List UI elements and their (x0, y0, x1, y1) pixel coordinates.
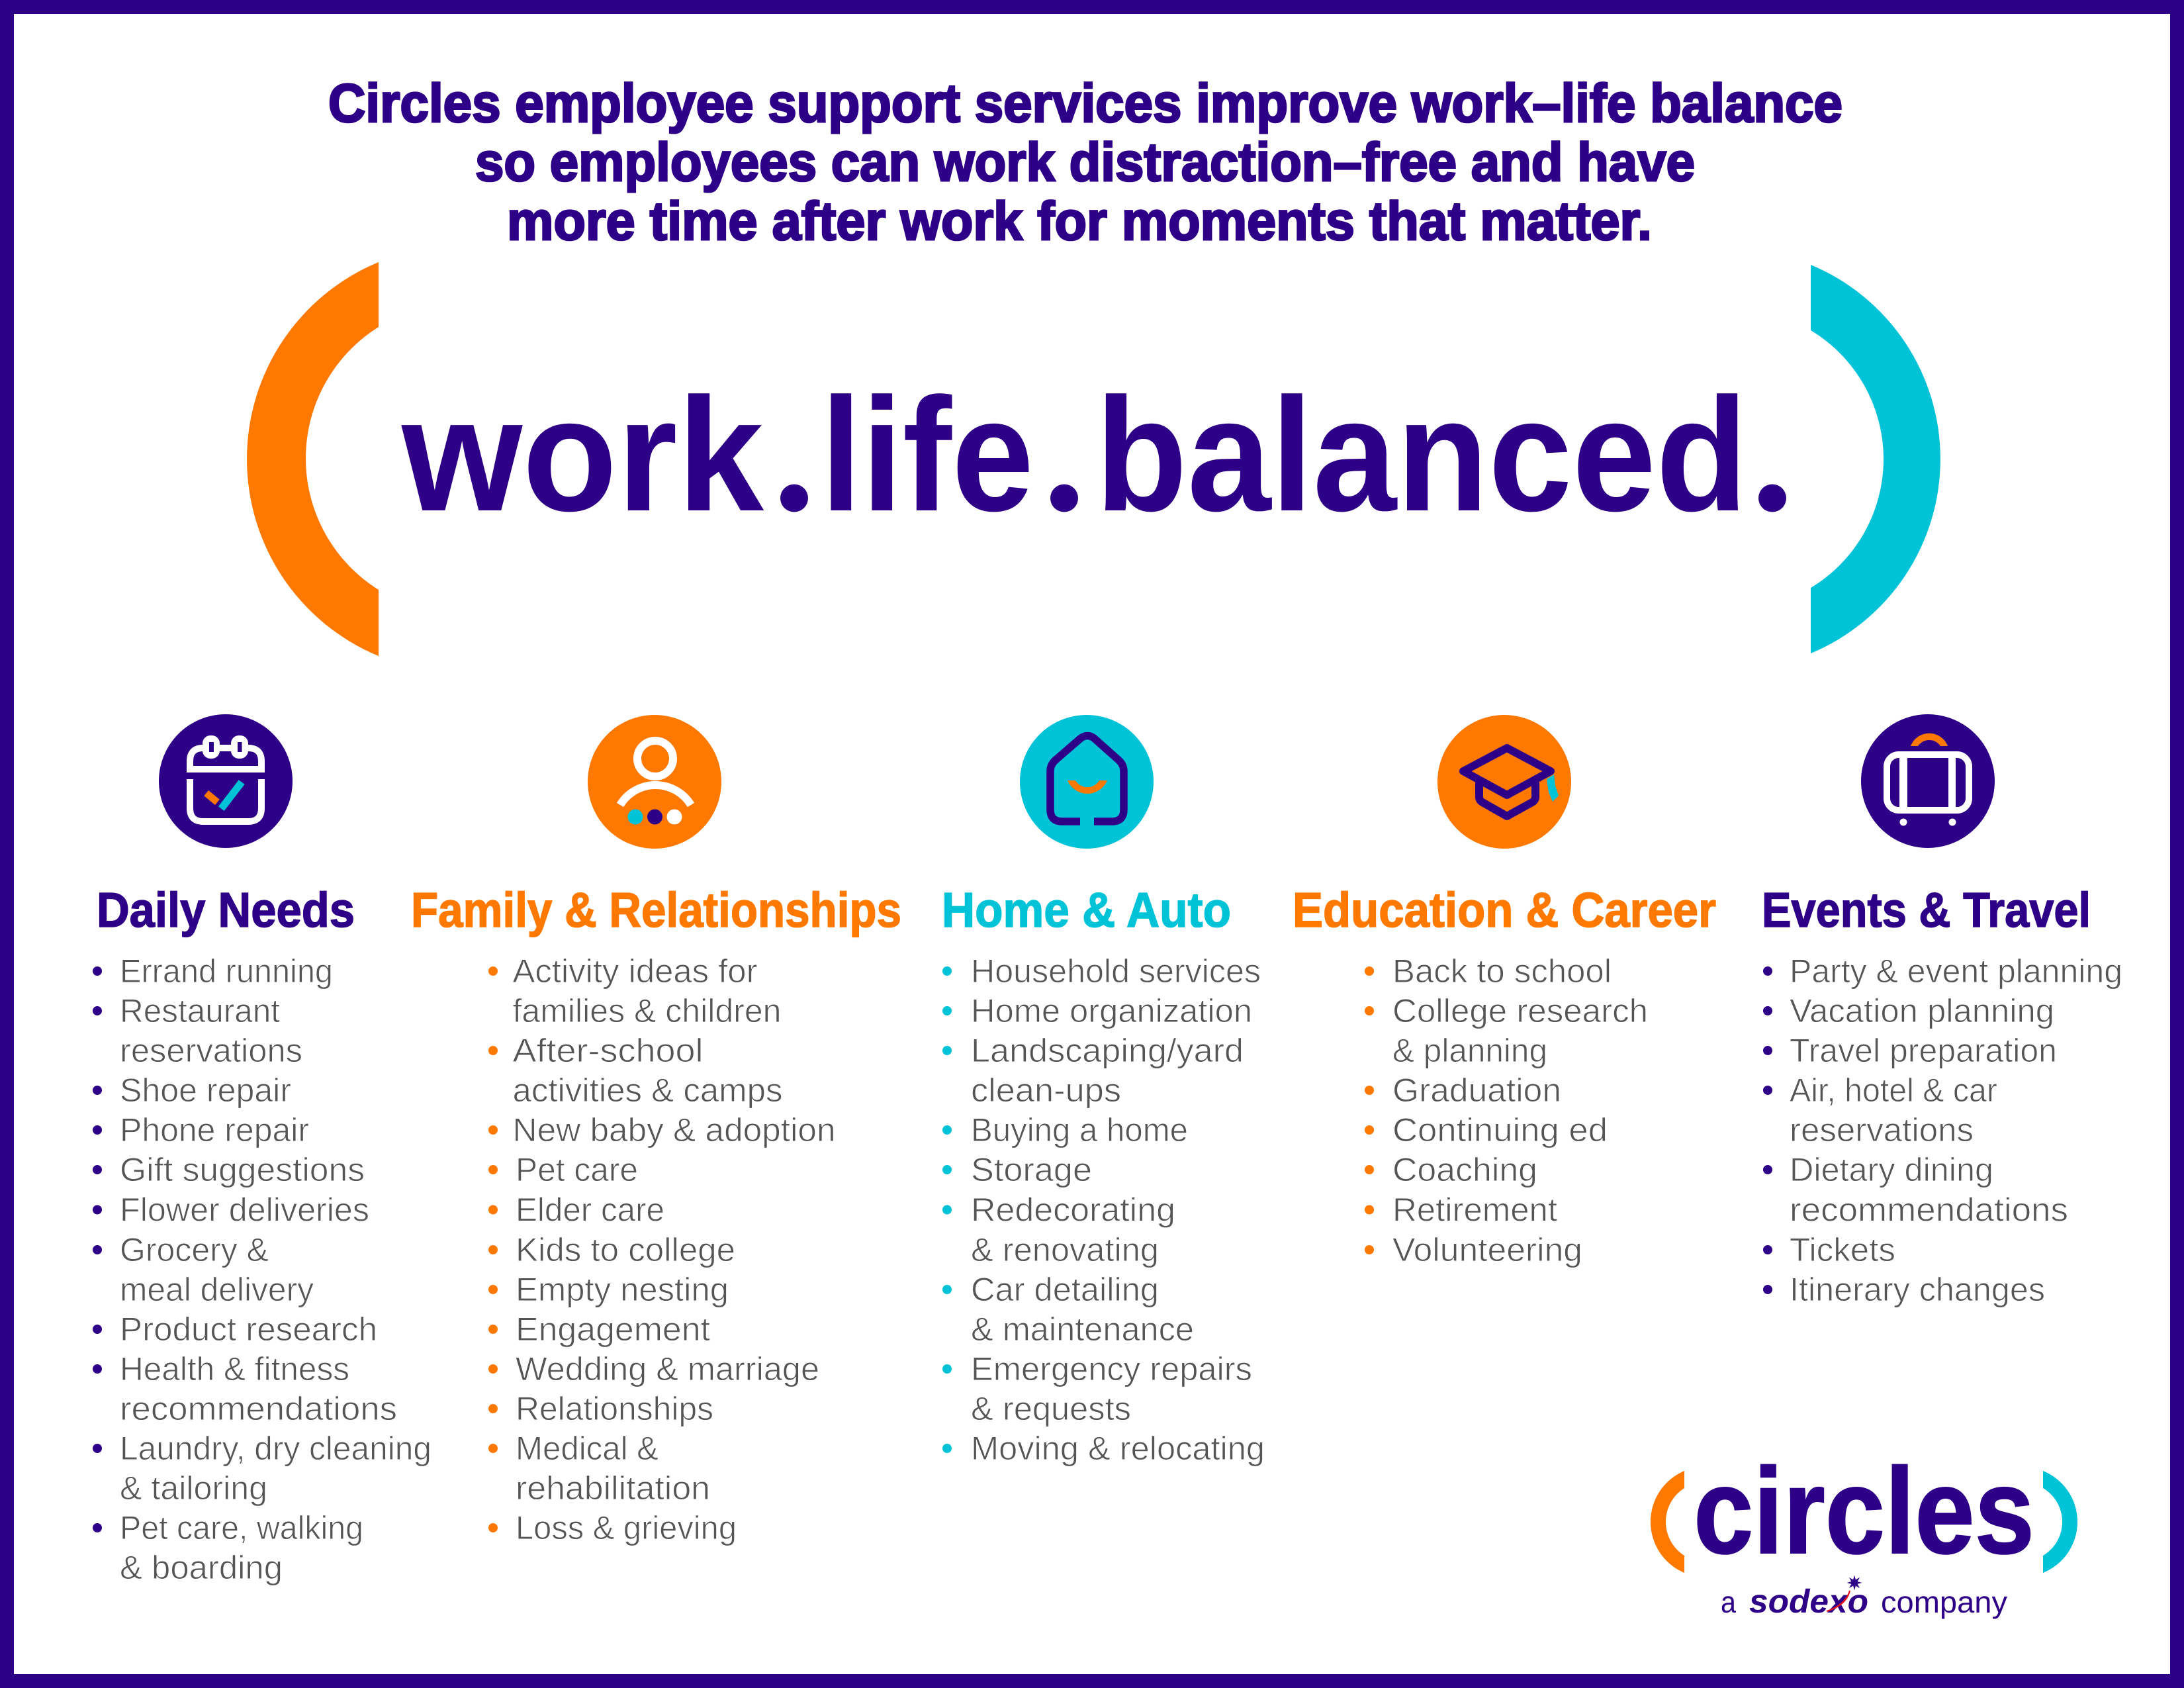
list: Events & Travel items (1763, 953, 2122, 1308)
list: Education & Career items: Back to school (1392, 953, 1612, 990)
list: Home & Auto items: Moving & relocating (971, 1430, 1265, 1467)
tagline: a sodexo company: a (1721, 1585, 1736, 1619)
list: Family & Relationships items: rehabilitation (516, 1470, 710, 1507)
title: so employees can work distraction–free and have (475, 132, 1695, 193)
list: Education & Career items (1365, 953, 1648, 1268)
list: Family & Relationships items: Relationships (516, 1390, 713, 1427)
list: Events & Travel items: Tickets (1790, 1231, 1895, 1268)
list: Family & Relationships items: Loss & grieving (516, 1509, 737, 1546)
list: Education & Career items: Volunteering (1392, 1231, 1582, 1268)
list: Daily Needs items: Errand running (120, 953, 333, 990)
list: Home & Auto items: Landscaping/yard (971, 1032, 1244, 1069)
tagline: a sodexo company (1721, 1575, 2007, 1620)
list: Daily Needs items: Restaurant (120, 992, 280, 1029)
panel: Education & Career (1293, 715, 1716, 1268)
list: Education & Career items: & planning (1392, 1032, 1547, 1069)
list: Daily Needs items: Pet care, walking (120, 1509, 363, 1546)
list: Family & Relationships items: Kids to college (516, 1231, 735, 1268)
list: Daily Needs items: Shoe repair (120, 1072, 291, 1109)
heading: Events & Travel: Events & Travel (1762, 882, 2091, 937)
list: Daily Needs items: & boarding (120, 1549, 283, 1586)
logo: circles, a sodexo company (1651, 1442, 2077, 1620)
list: Daily Needs items: Phone repair (120, 1111, 309, 1149)
heading: Daily Needs: Daily Needs (97, 882, 355, 937)
list: Family & Relationships items: Pet care (516, 1151, 638, 1188)
list: Home & Auto items: clean-ups (971, 1072, 1121, 1109)
list: Events & Travel items: Air, hotel & car (1790, 1072, 1997, 1109)
list: Daily Needs items: Grocery & (120, 1231, 269, 1268)
list: Home & Auto items: Buying a home (971, 1111, 1188, 1149)
list: Family & Relationships items: New baby & adoption (512, 1111, 835, 1149)
list: Daily Needs items: Gift suggestions (120, 1151, 365, 1188)
list: Family & Relationships items: Wedding & marriage (516, 1350, 819, 1387)
list: Home & Auto items: & maintenance (971, 1311, 1194, 1348)
title (328, 73, 1843, 252)
title: more time after work for moments that matter. (507, 191, 1652, 252)
list: Events & Travel items: Party & event planning (1790, 953, 2122, 990)
list: Family & Relationships items: families & children (512, 992, 781, 1029)
list: Home & Auto items: Redecorating (971, 1192, 1175, 1229)
headline: work.life.balanced.: . (777, 394, 811, 534)
list: Home & Auto items (942, 953, 1265, 1467)
list: Education & Career items: Graduation (1392, 1072, 1561, 1109)
headline: work.life.balanced.: balanced (1095, 364, 1748, 545)
list: Family & Relationships items: Elder care (516, 1192, 664, 1229)
list: Family & Relationships items: Activity ideas for (512, 953, 757, 990)
list: Education & Career items: Continuing ed (1392, 1111, 1608, 1149)
icon: graduation cap (1437, 715, 1571, 849)
list: Education & Career items: College research (1392, 992, 1648, 1029)
list: Daily Needs items: Product research (120, 1311, 377, 1348)
panel: Family & Relationships (411, 715, 901, 1546)
icon: person with three dots (588, 715, 721, 849)
list: Family & Relationships items: After-school (512, 1032, 703, 1069)
list: Home & Auto items: & requests (971, 1390, 1131, 1427)
list: Daily Needs items: Flower deliveries (120, 1192, 369, 1229)
icon: house with smile (1020, 715, 1154, 849)
heading: Home & Auto: Home & Auto (942, 882, 1231, 937)
list: Home & Auto items: Storage (971, 1151, 1092, 1188)
list: Daily Needs items: & tailoring (120, 1470, 267, 1507)
headline: work.life.balanced.: life (821, 364, 1034, 545)
list: Family & Relationships items: activities & camps (512, 1072, 782, 1109)
list: Home & Auto items: Household services (971, 953, 1261, 990)
panel: Daily Needs (93, 714, 432, 1586)
list: Events & Travel items: recommendations (1790, 1192, 2068, 1229)
list: Education & Career items: Retirement (1392, 1192, 1557, 1229)
list: Education & Career items: Coaching (1392, 1151, 1537, 1188)
list: Daily Needs items: Health & fitness (120, 1350, 349, 1387)
cyan right bracket (1811, 265, 1940, 653)
panel: Events & Travel (1762, 714, 2122, 1308)
headline: work.life.balanced.: . (1047, 394, 1081, 534)
list: Daily Needs items: Laundry, dry cleaning (120, 1430, 432, 1467)
list: Home & Auto items: Emergency repairs (971, 1350, 1252, 1387)
heading: Family & Relationships: Family & Relationships (411, 882, 901, 937)
list: Events & Travel items: Dietary dining (1790, 1151, 1993, 1188)
list: Home & Auto items: Home organization (971, 992, 1252, 1029)
logo bracket: orange (1651, 1471, 1684, 1573)
icon: calendar with check mark (159, 714, 293, 848)
list: Family & Relationships items: Empty nesting (516, 1271, 729, 1308)
list: Events & Travel items: reservations (1790, 1111, 1974, 1149)
list: Events & Travel items: Vacation planning (1790, 992, 2054, 1029)
tagline: a sodexo company: sodexo (1749, 1583, 1868, 1620)
list: Daily Needs items (93, 953, 432, 1586)
headline: work.life.balanced.: work (401, 364, 764, 545)
headline: work.life.balanced. (401, 364, 1790, 545)
list: Daily Needs items: meal delivery (120, 1271, 314, 1308)
logo bracket: cyan (2043, 1471, 2077, 1573)
panel: Home & Auto (942, 715, 1265, 1467)
tagline: a sodexo company: company (1881, 1585, 2007, 1619)
headline: work.life.balanced.: . (1755, 394, 1790, 534)
title: Circles employee support services improve work–life balance (328, 73, 1843, 134)
list: Family & Relationships items: Medical & (516, 1430, 659, 1467)
list: Events & Travel items: Itinerary changes (1790, 1271, 2045, 1308)
logo wordmark: circles: circles (1694, 1442, 2034, 1579)
list: Events & Travel items: Travel preparation (1790, 1032, 2057, 1069)
list: Family & Relationships items (488, 953, 835, 1546)
orange left bracket (247, 262, 379, 656)
list: Home & Auto items: & renovating (971, 1231, 1159, 1268)
list: Daily Needs items: recommendations (120, 1390, 397, 1427)
list: Daily Needs items: reservations (120, 1032, 302, 1069)
list: Family & Relationships items: Engagement (516, 1311, 710, 1348)
list: Home & Auto items: Car detailing (971, 1271, 1159, 1308)
heading: Education & Career: Education & Career (1293, 882, 1716, 937)
icon: suitcase (1861, 714, 1995, 848)
